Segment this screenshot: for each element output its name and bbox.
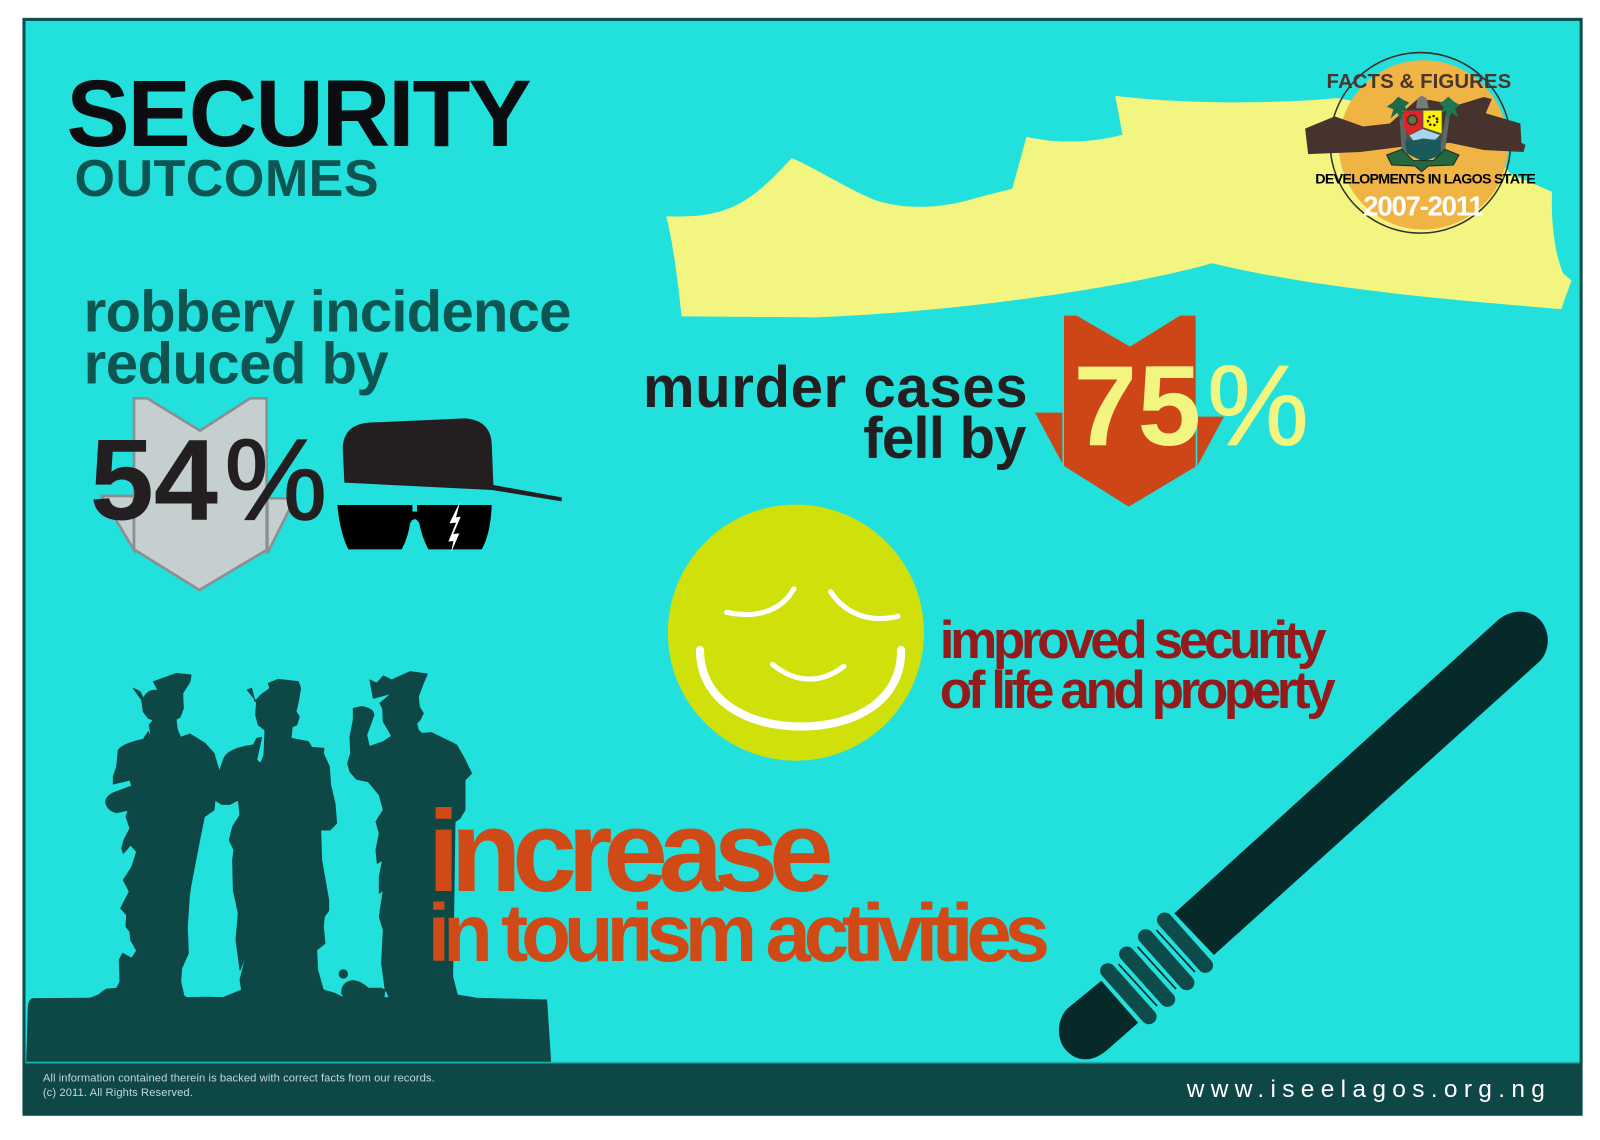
- security of life text: [940, 611, 1336, 720]
- footer text: [27, 1062, 1580, 1103]
- map of Lagos: yellow: [666, 96, 1571, 317]
- yellow shield half: [1423, 111, 1442, 133]
- cap: [343, 418, 562, 501]
- right eye: [831, 592, 898, 619]
- logo brown Lagos map: [1305, 97, 1526, 154]
- crown: [1416, 96, 1429, 108]
- robbery statistic: [84, 280, 571, 590]
- nose smile: [772, 664, 844, 679]
- icon: police baton: [1059, 612, 1548, 1059]
- baton shaft: [1174, 612, 1548, 955]
- icon: smiling face: [668, 505, 924, 761]
- title: [66, 61, 532, 208]
- 54 percent figure: %: [224, 416, 327, 544]
- sunglasses: [337, 505, 492, 549]
- logo: facts and figures badge: [1305, 53, 1536, 233]
- logo coat of arms: [1387, 96, 1460, 172]
- murder caption: murder cases: [643, 355, 1028, 420]
- baton grip lines: [1119, 930, 1195, 1006]
- down arrow orange: [1035, 316, 1224, 507]
- left palm: [1387, 97, 1409, 122]
- logo heading: FACTS & FIGURES: [1327, 71, 1511, 93]
- logo years: 2007-2011: [1363, 190, 1484, 221]
- logo orange disc: [1339, 60, 1508, 230]
- 54 percent figure: [90, 416, 327, 544]
- water panel: [1405, 139, 1442, 162]
- in tourism activities: in tourism activities: [428, 888, 1050, 979]
- glint: [448, 502, 461, 553]
- red shield half: [1404, 111, 1422, 135]
- right palm: [1439, 97, 1460, 122]
- silhouette: three statues on a plinth: [27, 672, 551, 1062]
- security of life text: of life and property: [940, 661, 1336, 720]
- motto ribbon: [1387, 149, 1459, 172]
- title main line: SECURITY: [66, 61, 532, 167]
- 54 percent figure: 54: [90, 416, 218, 544]
- robbery statistic: reduced by: [84, 332, 389, 397]
- 75 percent figure: 75: [1073, 343, 1202, 470]
- face: [668, 505, 924, 761]
- increase word: increase: [428, 786, 834, 916]
- murder statistic: fell by: [863, 406, 1027, 471]
- footer separator line: [27, 1062, 1580, 1063]
- disclaimer: All information contained therein is backed with correct facts from our records.: [43, 1073, 435, 1085]
- website: www.iseelagos.org.ng: [1186, 1076, 1545, 1103]
- mouth: [700, 650, 901, 727]
- footer bar: [23, 1063, 1582, 1114]
- tourism text: [428, 786, 1050, 979]
- palm trunks: [1399, 113, 1450, 152]
- logo subtitle: DEVELOPMENTS IN LAGOS STATE: [1315, 172, 1536, 188]
- left eye: [727, 589, 794, 614]
- baton grip rings: [1108, 920, 1205, 1017]
- icon: robber with cap and sunglasses: [337, 418, 562, 553]
- logo outline ring: [1330, 53, 1511, 233]
- robbery caption: robbery incidence: [84, 280, 571, 345]
- 75 percent figure: %: [1207, 343, 1309, 470]
- murder statistic: [643, 316, 1309, 507]
- 75 percent figure: [1073, 343, 1309, 470]
- down arrow grey: [102, 398, 295, 590]
- security of life text: improved security: [940, 611, 1327, 670]
- baton handle: [1059, 981, 1138, 1059]
- footer text: (c) 2011. All Rights Reserved.: [43, 1087, 193, 1099]
- crest backing: [1403, 110, 1443, 162]
- title second line: OUTCOMES: [74, 150, 379, 208]
- shield base: [1409, 129, 1440, 141]
